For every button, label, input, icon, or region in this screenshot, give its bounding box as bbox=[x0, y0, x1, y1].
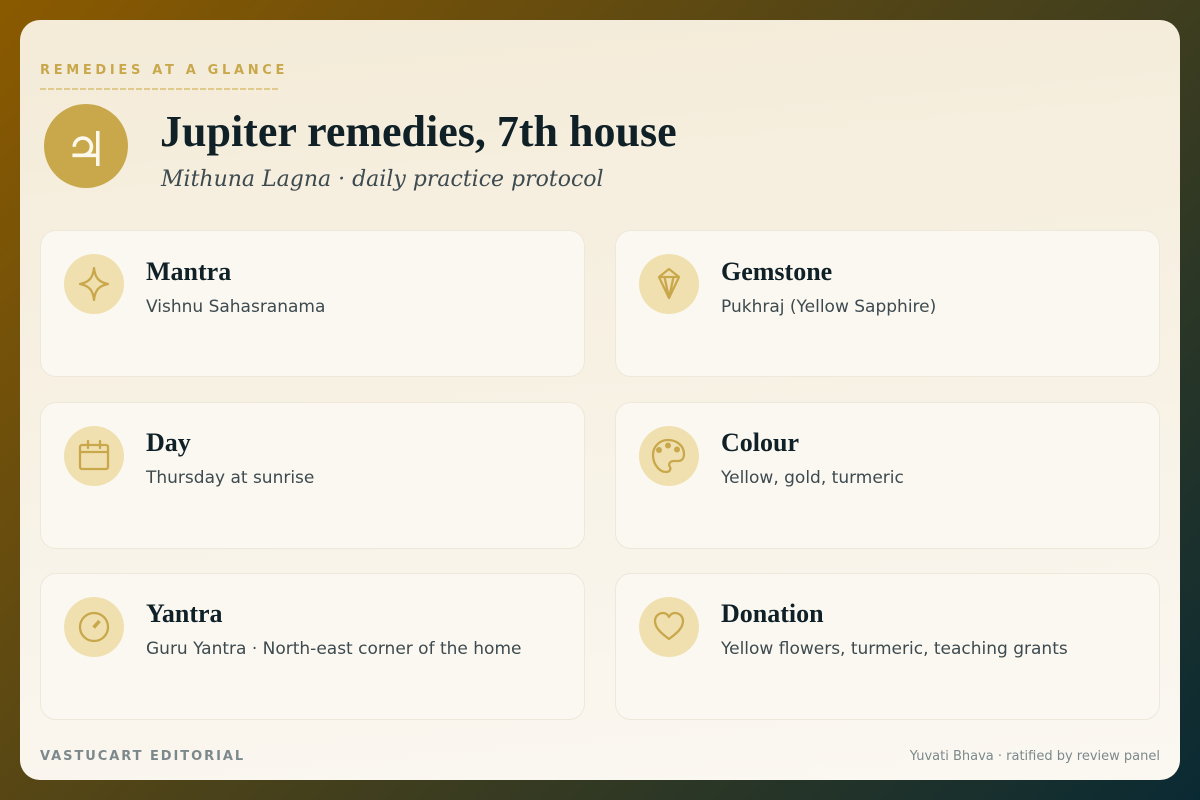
icon: palette bbox=[639, 426, 699, 486]
panel: Donation bbox=[615, 573, 1160, 720]
icon: sparkle bbox=[64, 254, 124, 314]
text: Gemstone detail: Pukhraj (Yellow Sapphire) bbox=[721, 297, 936, 317]
icon: calendar bbox=[64, 426, 124, 486]
panel: Colour bbox=[615, 402, 1160, 549]
heading: Day: Day bbox=[146, 428, 191, 457]
icon: Jupiter symbol badge bbox=[44, 104, 128, 188]
icon: gem bbox=[639, 254, 699, 314]
icon: Jupiter symbol badge: ♃ bbox=[64, 122, 108, 178]
text: Colour detail: Yellow, gold, turmeric bbox=[721, 468, 904, 488]
footer: brand: VASTUCART EDITORIAL bbox=[40, 749, 245, 764]
heading: Colour: Colour bbox=[721, 428, 799, 457]
panel: Day bbox=[40, 402, 585, 549]
heading: Gemstone: Gemstone bbox=[721, 257, 832, 286]
text: Yantra detail: Guru Yantra · North-east corner of the home bbox=[146, 639, 521, 659]
icon: heart bbox=[639, 597, 699, 657]
eyebrow label: REMEDIES AT A GLANCE bbox=[40, 63, 288, 78]
title: Jupiter remedies, 7th house bbox=[160, 107, 677, 156]
subtitle: Mithuna Lagna · daily practice protocol bbox=[161, 167, 604, 192]
text: Mantra detail: Vishnu Sahasranama bbox=[146, 297, 325, 317]
panel: Gemstone bbox=[615, 230, 1160, 377]
icon: compass bbox=[64, 597, 124, 657]
text: Day detail: Thursday at sunrise bbox=[146, 468, 314, 488]
heading: Donation: Donation bbox=[721, 599, 824, 628]
panel: Mantra bbox=[40, 230, 585, 377]
text: Donation detail: Yellow flowers, turmeric, teaching grants bbox=[721, 639, 1068, 659]
panel: Yantra bbox=[40, 573, 585, 720]
heading: Mantra: Mantra bbox=[146, 257, 231, 286]
footer: note: Yuvati Bhava · ratified by review panel bbox=[910, 749, 1160, 764]
heading: Yantra: Yantra bbox=[146, 599, 223, 628]
